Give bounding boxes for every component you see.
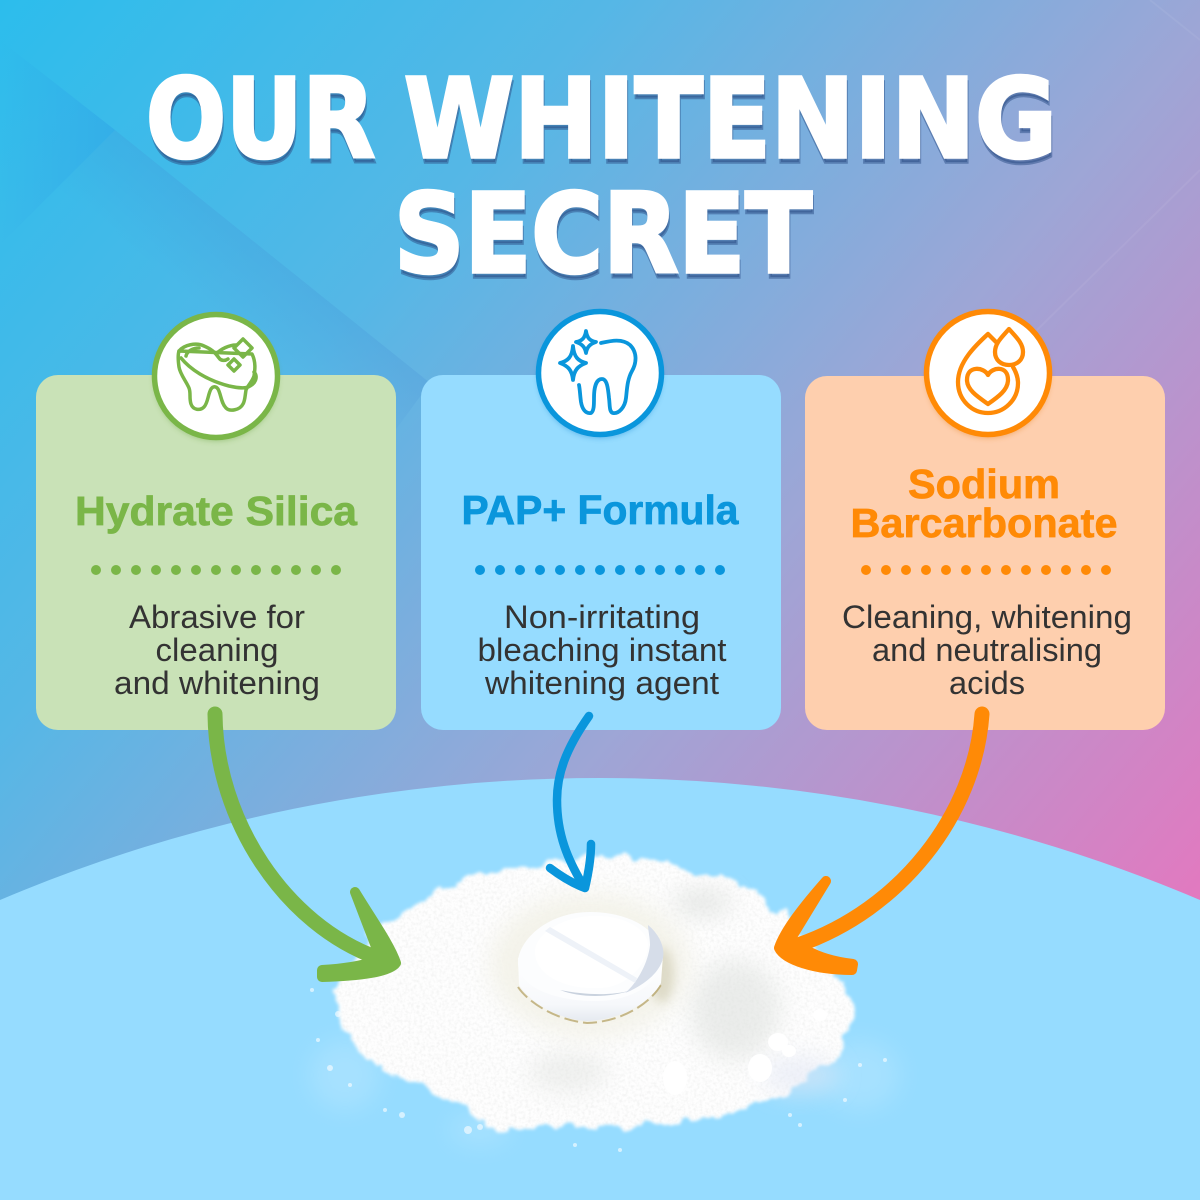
description: Abrasive for [129,599,305,635]
card: Sodium Barcarbonate [805,312,1165,730]
title: WHITENING [405,60,1058,188]
heading: Sodium Barcarbonate: Sodium [908,461,1060,507]
title [146,55,1058,303]
description: and whitening [114,665,320,701]
heading: Hydrate Silica: Hydrate Silica [75,488,358,534]
card: PAP+ Formula [421,312,781,730]
description [842,599,1132,701]
description: whitening agent [484,665,719,701]
title: OUR [147,60,376,188]
title: WHITENING [404,55,1057,183]
description: Non-irritating [504,599,700,635]
heading: Sodium Barcarbonate: Barcarbonate [850,500,1118,546]
title: OUR [146,55,375,183]
bottom light-blue surface [0,778,1200,1200]
arrow: green [215,714,396,977]
title: SECRET [394,170,812,298]
arrow: blue [550,716,591,888]
heading: Sodium Barcarbonate [850,461,1118,546]
card: Hydrate Silica [36,314,396,730]
arrow: orange [779,714,982,970]
description: acids [949,665,1025,701]
powder pile with tablet [310,853,900,1152]
heading: PAP+ Formula: PAP+ Formula [462,487,740,533]
description [478,599,727,701]
dotted divider blue [475,565,725,575]
tablet [518,912,674,1023]
powder clumps [663,1009,827,1095]
description [114,599,320,701]
description: bleaching instant [478,632,727,668]
powder haze [310,1040,900,1146]
scattered grains [310,988,887,1152]
title: SECRET [395,175,813,303]
dotted divider orange [861,565,1111,575]
description: and neutralising [872,632,1102,668]
icon: drops with heart [926,312,1050,438]
description: cleaning [156,632,278,668]
dotted divider green [91,565,341,575]
icon: tooth with heart band [154,314,278,441]
icon: sparkling tooth [538,312,662,438]
description: Cleaning, whitening [842,599,1132,635]
